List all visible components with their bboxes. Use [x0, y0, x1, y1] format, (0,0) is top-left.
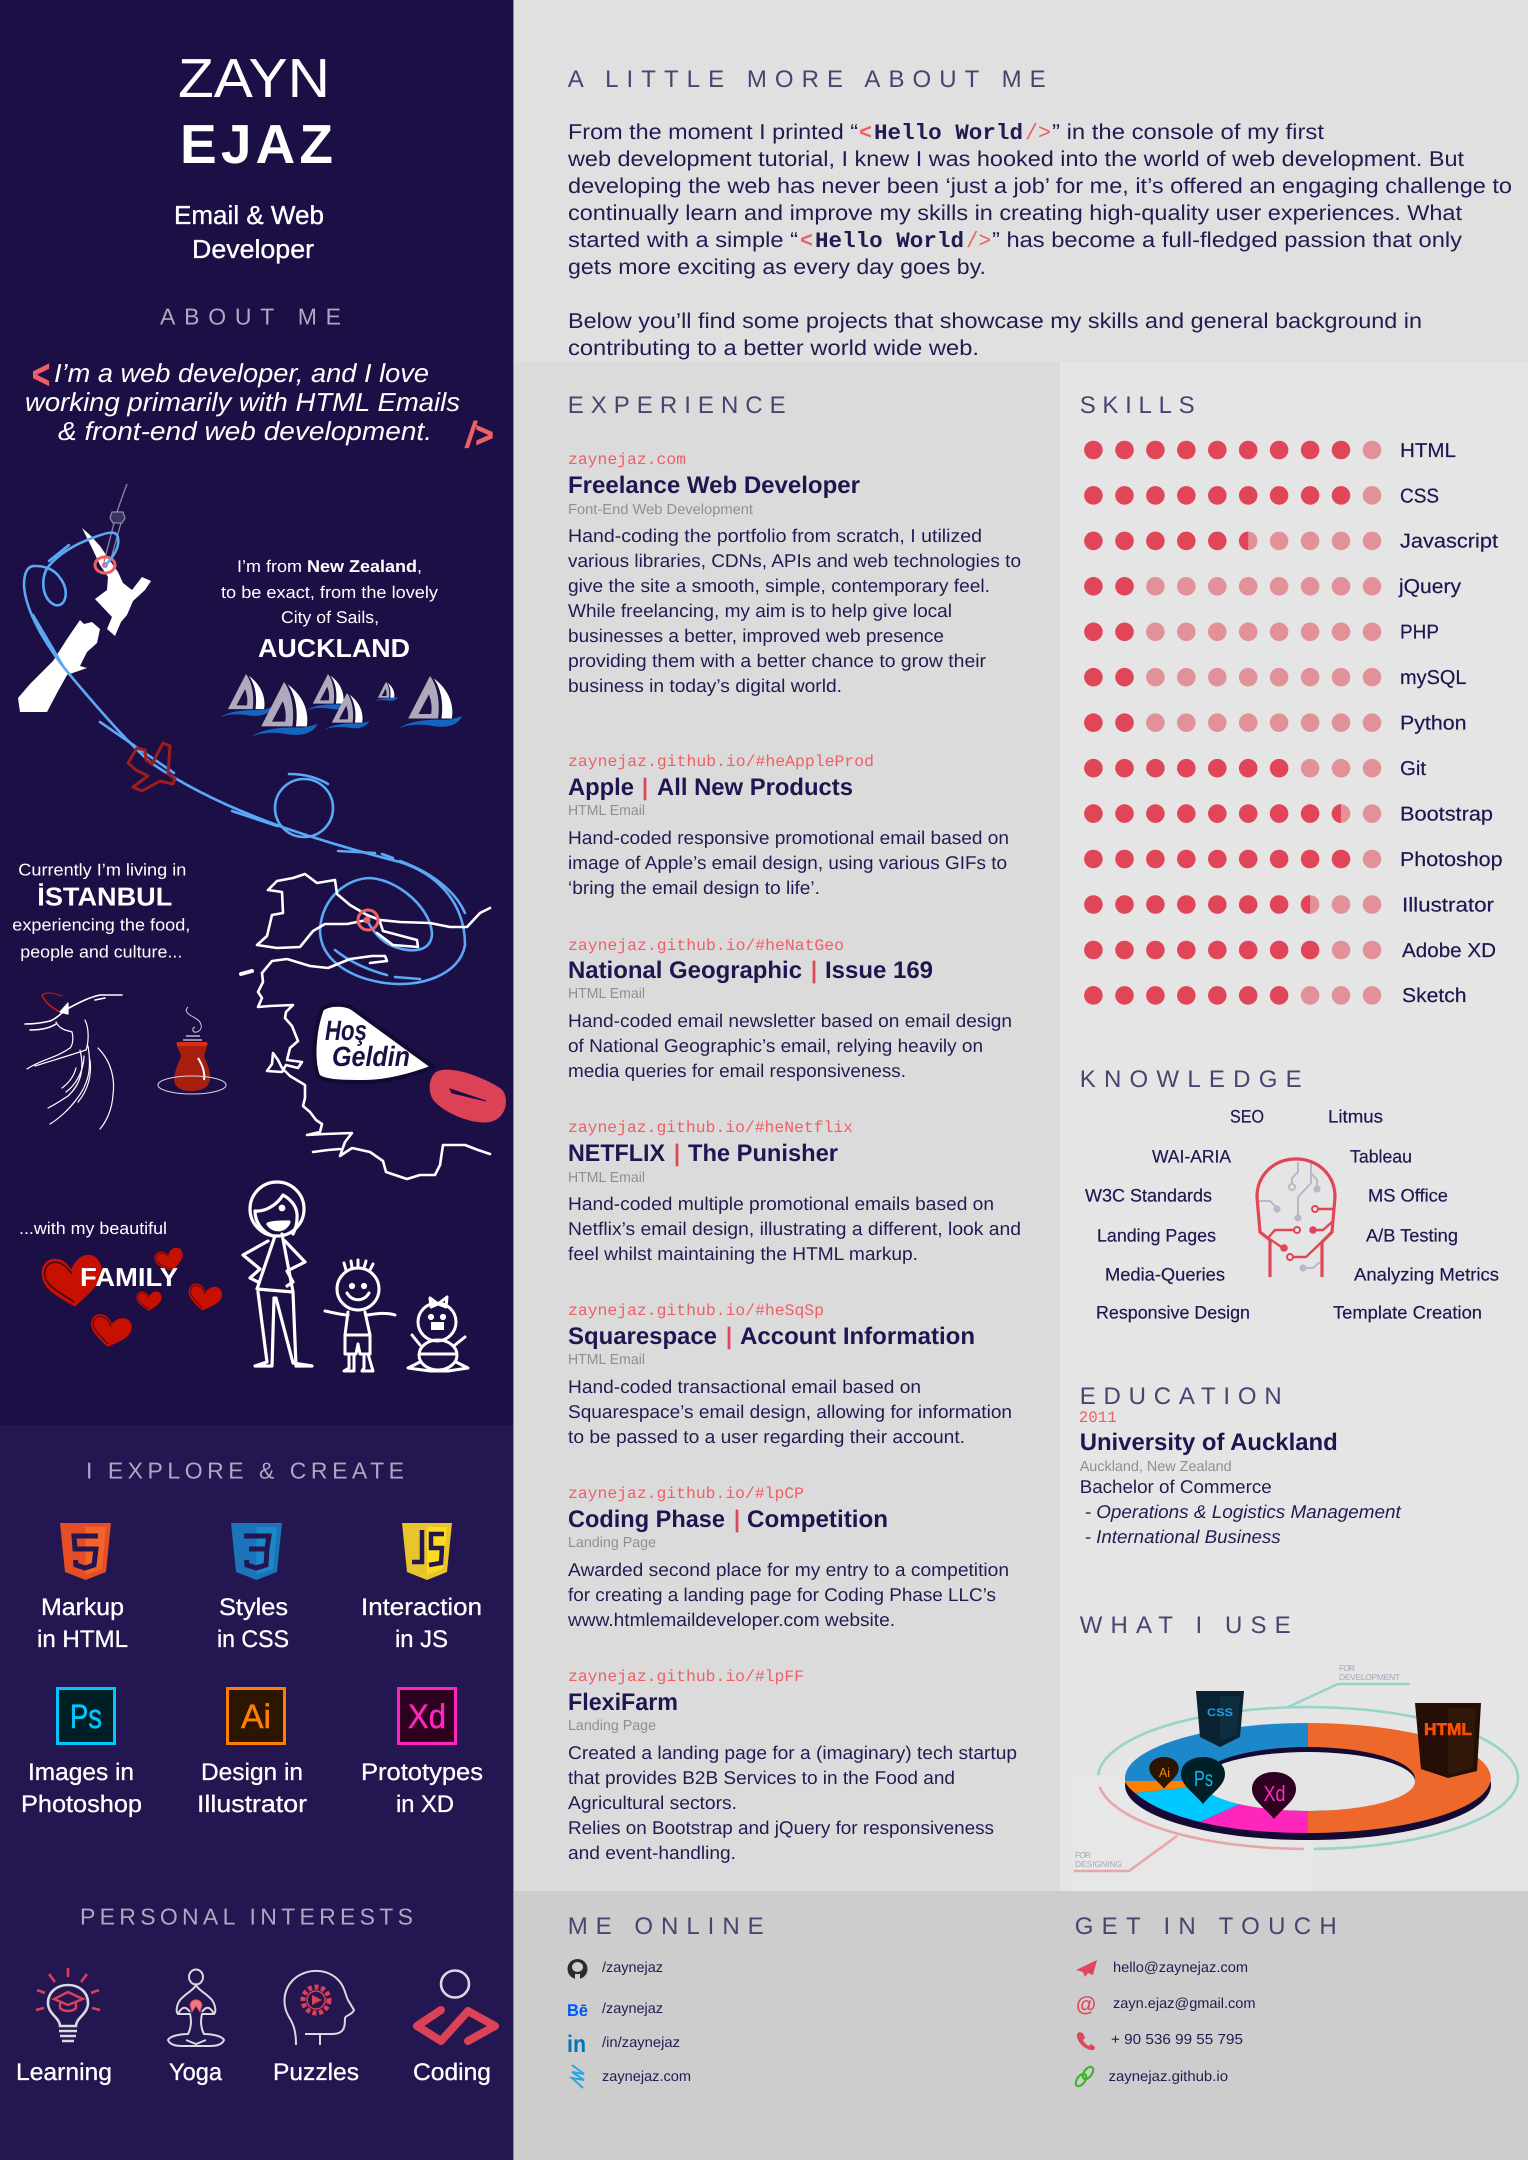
text block: knowledge left column [1085, 1107, 1264, 1323]
illustration: sailboats [219, 674, 462, 737]
entry: Squarespace: to be passed to a user regarding their account. [568, 1426, 965, 1447]
chart: skill Javascript: Javascript [1400, 531, 1498, 553]
illustration: son stick figure [325, 1260, 395, 1371]
illustration: hearts [40, 1246, 223, 1350]
text block: living in Istanbul: experiencing the food, [12, 915, 190, 934]
icon: website logo [572, 2065, 584, 2088]
illustration: flight path [24, 533, 465, 984]
icon: Adobe XD [398, 1688, 456, 1744]
entry: Squarespace: Account Information [740, 1323, 975, 1350]
entry: Netflix [568, 1119, 1021, 1264]
icon: plane [128, 743, 175, 791]
text block: education entry: - International Business [1085, 1526, 1281, 1547]
icon: Behance: Bē [567, 2001, 588, 2020]
text block: knowledge left column: SEO [1230, 1107, 1264, 1127]
callout: Hos Geldin speech bubble: Hoş [325, 1015, 367, 1046]
text block: knowledge left column: Landing Pages [1097, 1226, 1216, 1246]
label: markup in HTML: in HTML [37, 1626, 128, 1653]
icon: link [1074, 2065, 1095, 2088]
entry: freelance web developer: business in today’s digital world. [568, 675, 842, 696]
entry: Coding Phase: zaynejaz.github.io/#lpCP [568, 1485, 804, 1503]
label: interaction in JS [361, 1594, 482, 1653]
illustration: Auckland sky tower [104, 484, 127, 562]
text block: living in Istanbul: İSTANBUL [37, 881, 172, 911]
icon: Ai drop [1149, 1757, 1179, 1788]
label: styles in CSS: Styles [219, 1594, 288, 1621]
icon: Ps drop: Ps [1194, 1766, 1213, 1791]
label: prototypes in XD [361, 1759, 483, 1818]
icon: CSS badge [1196, 1691, 1244, 1747]
chart: skill Git: Git [1400, 758, 1426, 780]
text block: sidebar intro quote: working primarily with HTML Emails [25, 387, 460, 417]
text block: about paragraph: < [800, 229, 813, 254]
illustration: whirling dervish [25, 993, 122, 1129]
text block: about paragraph: developing the web has never been ‘just a job’ for me, it’s offered an engaging challenge to [568, 174, 1512, 198]
icon: Ai drop: Ai [1159, 1765, 1170, 1780]
chart: skill mySQL: mySQL [1400, 667, 1466, 689]
text block: about paragraph: < [859, 121, 872, 146]
illustration: mother stick figure [243, 1182, 312, 1366]
entry: Squarespace [568, 1302, 1012, 1447]
title: name: EJAZ [180, 113, 333, 175]
text: behance handle: /zaynejaz [602, 2001, 663, 2017]
entry: freelance web developer: give the site a smooth, simple, contemporary feel. [568, 575, 990, 596]
entry: FlexiFarm: Agricultural sectors. [568, 1792, 737, 1813]
subtitle: role: Developer [192, 234, 314, 264]
chart: skill PHP [1084, 622, 1439, 644]
text block: about paragraph: ” has become a full-fledged passion that only [992, 228, 1462, 252]
chart: skill PHP: PHP [1400, 622, 1439, 644]
icon: HTML badge: HTML [1424, 1720, 1472, 1739]
entry: Apple: zaynejaz.github.io/#heAppleProd [568, 753, 874, 771]
label: family: FAMILY [80, 1262, 178, 1292]
entry: National Geographic: | [811, 957, 817, 984]
label: design in Illustrator: Illustrator [197, 1791, 307, 1818]
text block: about paragraph: gets more exciting as every day goes by. [568, 255, 986, 279]
chart: skill Photoshop: Photoshop [1400, 849, 1502, 871]
text block: about paragraph [567, 120, 1512, 360]
entry: freelance web developer: Hand-coding the portfolio from scratch, I utilized [568, 525, 982, 546]
label: images in Photoshop [21, 1759, 142, 1818]
entry: freelance web developer: providing them with a better chance to grow their [568, 650, 986, 671]
callout: Hos Geldin speech bubble: Geldin [332, 1041, 410, 1072]
label: for designing [1075, 1850, 1122, 1869]
entry: freelance web developer: Font-End Web Development [568, 502, 753, 518]
icon: Xd drop [1252, 1772, 1296, 1819]
chart: skill Javascript [1084, 531, 1498, 553]
icon: learning bulb [36, 1968, 100, 2041]
label: yoga: Yoga [169, 2059, 223, 2086]
entry: National Geographic: zaynejaz.github.io/#heNatGeo [568, 937, 844, 955]
text block: about paragraph: contributing to a better world wide web. [568, 336, 979, 360]
text block: education entry: Auckland, New Zealand [1080, 1459, 1232, 1475]
entry: freelance web developer [568, 451, 1021, 696]
entry: Coding Phase: www.htmlemaildeveloper.com website. [567, 1609, 895, 1630]
icon: Illustrator [228, 1688, 284, 1744]
icon: Xd drop: Xd [1264, 1781, 1286, 1806]
icon: circuit head [1257, 1159, 1335, 1277]
label: design in Illustrator: Design in [201, 1759, 303, 1786]
heading: me online: ME ONLINE [568, 1913, 764, 1940]
text block: sidebar intro quote: /> [464, 414, 493, 455]
text block: knowledge right column: A/B Testing [1366, 1226, 1458, 1246]
icon: Photoshop: Ps [70, 1698, 102, 1736]
entry: Apple: All New Products [657, 774, 853, 801]
icon: HTML5 shield [60, 1523, 111, 1580]
subtitle: role [174, 200, 324, 264]
text block: education entry: University of Auckland [1080, 1429, 1338, 1456]
icon: Ps drop [1181, 1757, 1225, 1804]
entry: Netflix: feel whilst maintaining the HTML markup. [568, 1243, 918, 1264]
text block: sidebar intro quote [25, 353, 493, 455]
entry: Apple: ‘bring the email design to life’. [568, 877, 820, 898]
entry: National Geographic: of National Geographic’s email, relying heavily on [568, 1035, 983, 1056]
title: name [178, 47, 333, 175]
heading: about me: ABOUT ME [160, 303, 341, 329]
entry: Apple: | [642, 774, 648, 801]
entry: National Geographic [568, 937, 1012, 1081]
label: for development [1339, 1663, 1400, 1682]
entry: Coding Phase: for creating a landing page for Coding Phase LLC’s [568, 1584, 996, 1605]
text block: education entry [1079, 1409, 1402, 1547]
chart: skill Git [1084, 758, 1426, 780]
entry: Netflix: Hand-coded multiple promotional emails based on [568, 1193, 994, 1214]
chart: skill Sketch [1084, 985, 1466, 1007]
chart: skill Python [1084, 712, 1466, 734]
text block: living in Istanbul [12, 860, 190, 961]
text block: knowledge left column: WAI-ARIA [1152, 1147, 1231, 1167]
chart: skill jQuery [1084, 576, 1461, 598]
label: images in Photoshop: Photoshop [21, 1791, 142, 1818]
heading: personal interests: PERSONAL INTERESTS [80, 1903, 413, 1929]
heading: skills: SKILLS [1080, 392, 1195, 419]
text block: about paragraph: web development tutorial, I knew I was hooked into the world of web development. But [567, 147, 1464, 171]
entry: Netflix: | [674, 1140, 680, 1167]
callout: designing arc [1074, 1787, 1304, 1871]
entry: Netflix: The Punisher [688, 1140, 838, 1167]
chart: skill CSS: CSS [1400, 485, 1439, 507]
icon: HTML badge [1415, 1703, 1481, 1778]
label: learning: Learning [16, 2059, 112, 2086]
text block: sidebar intro quote: & front-end web development. [58, 416, 432, 446]
label: prototypes in XD: in XD [396, 1791, 454, 1818]
entry: Coding Phase [567, 1485, 1009, 1630]
entry: Squarespace: | [726, 1323, 732, 1350]
text block: education entry: - Operations & Logistics Management [1085, 1501, 1402, 1522]
chart: skill HTML [1084, 440, 1456, 462]
heading: knowledge: KNOWLEDGE [1080, 1066, 1302, 1093]
entry: National Geographic: Issue 169 [825, 957, 933, 984]
heading: a little more about me: A LITTLE MORE ABOUT ME [568, 66, 1046, 93]
label: prototypes in XD: Prototypes [361, 1759, 483, 1786]
label: interaction in JS: Interaction [361, 1594, 482, 1621]
chart: skill mySQL [1084, 667, 1466, 689]
illustration: map of Turkey [241, 874, 490, 1179]
text block: knowledge left column: Responsive Design [1096, 1303, 1250, 1323]
entry: Squarespace: HTML Email [568, 1352, 645, 1368]
icon: Auckland location target [95, 557, 115, 573]
entry: Netflix: zaynejaz.github.io/#heNetflix [568, 1119, 853, 1137]
label: coding: Coding [413, 2059, 491, 2086]
text block: about paragraph: /> [1025, 121, 1051, 146]
text block: knowledge right column: MS Office [1368, 1186, 1448, 1206]
label: images in Photoshop: Images in [28, 1759, 134, 1786]
entry: Coding Phase: Awarded second place for my entry to a competition [568, 1559, 1009, 1580]
text block: knowledge right column [1328, 1107, 1499, 1323]
entry: National Geographic: National Geographic [568, 957, 802, 984]
callout: development arc [1098, 1684, 1518, 1849]
text block: from New Zealand [221, 557, 439, 663]
entry: FlexiFarm: and event-handling. [568, 1842, 736, 1863]
chart: skill Photoshop [1084, 849, 1502, 871]
entry: FlexiFarm: Created a landing page for a (imaginary) tech startup [568, 1742, 1017, 1763]
icon: Istanbul location target [358, 910, 378, 930]
heading: get in touch: GET IN TOUCH [1075, 1913, 1337, 1940]
icon: CSS badge: CSS [1207, 1707, 1233, 1719]
entry: Coding Phase: Coding Phase [568, 1506, 725, 1533]
chart: skill CSS [1084, 485, 1439, 507]
entry: Coding Phase: | [734, 1506, 740, 1533]
text block: about paragraph: started with a simple “ [568, 228, 798, 252]
callout: Hos Geldin speech bubble [315, 1005, 433, 1082]
text: github pages: zaynejaz.github.io [1108, 2069, 1228, 2085]
chart: skill Illustrator: Illustrator [1402, 894, 1494, 916]
text block: beautiful family: ...with my beautiful [19, 1219, 167, 1238]
icon: paper plane [1076, 1960, 1097, 1977]
entry: Squarespace: Squarespace [568, 1323, 717, 1350]
label: styles in CSS: in CSS [217, 1626, 289, 1653]
entry: freelance web developer: While freelancing, my aim is to help give local [568, 600, 952, 621]
text: website: zaynejaz.com [602, 2069, 691, 2085]
icon: GitHub [568, 1959, 588, 1979]
text block: education entry: Bachelor of Commerce [1080, 1476, 1272, 1497]
entry: Apple: image of Apple’s email design, using various GIFs to [568, 852, 1007, 873]
text block: about paragraph: Below you’ll find some projects that showcase my skills and general background in [568, 309, 1422, 333]
label: markup in HTML: Markup [41, 1594, 124, 1621]
entry: Coding Phase: Competition [747, 1506, 888, 1533]
entry: Netflix: HTML Email [568, 1170, 645, 1186]
entry: Coding Phase: Landing Page [568, 1535, 656, 1551]
label: interaction in JS: in JS [395, 1626, 448, 1653]
icon: yoga figure [168, 1970, 224, 2046]
text block: about paragraph: ” in the console of my first [1052, 120, 1324, 144]
panel: main content backgrounds [514, 0, 1528, 2160]
text: email 2: zayn.ejaz@gmail.com [1113, 1996, 1256, 2012]
text: email 1: hello@zaynejaz.com [1113, 1960, 1248, 1976]
text block: education entry: 2011 [1079, 1409, 1117, 1427]
text block: about paragraph: Hello World [815, 229, 964, 254]
label: for development: DEVELOPMENT [1339, 1672, 1400, 1682]
label: for development: FOR [1339, 1663, 1355, 1673]
icon: puzzles head [284, 1971, 354, 2045]
entry: Apple: Apple [568, 774, 634, 801]
text block: knowledge right column: Litmus [1328, 1107, 1383, 1127]
entry: FlexiFarm: Landing Page [568, 1718, 656, 1734]
chart: skill Bootstrap: Bootstrap [1400, 803, 1493, 825]
chart: skill Bootstrap [1084, 803, 1493, 825]
label: markup in HTML [37, 1594, 128, 1653]
entry: FlexiFarm: FlexiFarm [568, 1689, 678, 1716]
label: design in Illustrator [197, 1759, 307, 1818]
entry: Squarespace: Squarespace’s email design, allowing for information [568, 1401, 1012, 1422]
label: puzzles: Puzzles [273, 2059, 359, 2086]
entry: freelance web developer: zaynejaz.com [568, 451, 686, 469]
entry: freelance web developer: various libraries, CDNs, APIs and web technologies to [568, 550, 1021, 571]
text block: knowledge right column: Tableau [1350, 1147, 1412, 1167]
illustration: Turkish tea [158, 1007, 226, 1094]
chart: skill HTML: HTML [1400, 440, 1456, 462]
text block: knowledge left column: Media-Queries [1105, 1265, 1225, 1285]
heading: I explore and create: I EXPLORE & CREATE [86, 1457, 404, 1483]
label: styles in CSS [217, 1594, 289, 1653]
icon: phone [1077, 2032, 1095, 2050]
text block: living in Istanbul: people and culture... [20, 942, 182, 961]
subtitle: role: Email & Web [174, 200, 324, 230]
entry: freelance web developer: businesses a better, improved web presence [568, 625, 944, 646]
text block: about paragraph: From the moment I printed “ [568, 120, 858, 144]
illustration: New Zealand map [18, 528, 151, 712]
text: phone number: + 90 536 99 55 795 [1111, 2032, 1243, 2048]
text block: from New Zealand: I’m from New Zealand , [237, 557, 422, 576]
chart: skill Adobe XD: Adobe XD [1402, 940, 1496, 962]
heading: experience: EXPERIENCE [568, 392, 786, 419]
text block: from New Zealand: City of Sails, [281, 608, 379, 627]
text: linkedin handle: /in/zaynejaz [602, 2035, 680, 2051]
entry: National Geographic: media queries for email responsiveness. [568, 1060, 906, 1081]
icon: Illustrator: Ai [241, 1698, 271, 1736]
entry: FlexiFarm: zaynejaz.github.io/#lpFF [568, 1668, 804, 1686]
entry: FlexiFarm: that provides B2B Services to in the Food and [568, 1767, 955, 1788]
text block: about paragraph: Hello World [874, 121, 1023, 146]
illustration: lips [430, 1070, 506, 1122]
label: for designing: DESIGNING [1075, 1859, 1122, 1869]
entry: Apple: Hand-coded responsive promotional email based on [568, 827, 1009, 848]
chart: skill jQuery: jQuery [1398, 576, 1461, 598]
entry: freelance web developer: Freelance Web Developer [568, 472, 860, 499]
entry: National Geographic: HTML Email [568, 986, 645, 1002]
text block: from New Zealand: AUCKLAND [258, 633, 410, 663]
entry: Squarespace: zaynejaz.github.io/#heSqSp [568, 1302, 824, 1320]
chart: skill Adobe XD [1084, 940, 1496, 962]
icon: Photoshop [58, 1688, 114, 1744]
icon: coding [417, 1970, 495, 2041]
entry: Netflix: NETFLIX [568, 1140, 665, 1167]
text block: knowledge left column: W3C Standards [1085, 1186, 1212, 1206]
heading: education: EDUCATION [1080, 1383, 1282, 1410]
icon: Adobe XD: Xd [408, 1698, 446, 1736]
chart: skill Illustrator [1084, 894, 1494, 916]
label: for designing: FOR [1075, 1850, 1091, 1860]
text block: about paragraph: /> [966, 229, 991, 254]
icon: CSS3 shield [231, 1523, 282, 1580]
icon: JS shield [402, 1523, 452, 1580]
icon: at sign: @ [1076, 1993, 1096, 2016]
chart: skill Sketch: Sketch [1402, 985, 1466, 1007]
entry: Netflix: Netflix’s email design, illustrating a different, look and [568, 1218, 1021, 1239]
text block: knowledge right column: Analyzing Metrics [1354, 1265, 1499, 1285]
icon: LinkedIn: in [567, 2031, 586, 2058]
entry: Apple: HTML Email [568, 803, 645, 819]
text: github handle: /zaynejaz [602, 1960, 663, 1976]
text block: sidebar intro quote: I’m a web developer, and I love [54, 358, 429, 388]
illustration: baby stick figure [408, 1297, 468, 1371]
text block: sidebar intro quote: < [32, 353, 50, 397]
chart: tools ring [1074, 1684, 1518, 1871]
chart: skill Python: Python [1400, 713, 1466, 735]
entry: Apple [568, 753, 1009, 898]
entry: Squarespace: Hand-coded transactional email based on [568, 1376, 921, 1397]
entry: FlexiFarm [568, 1668, 1017, 1863]
title: name: ZAYN [178, 47, 330, 109]
text block: knowledge right column: Template Creation [1333, 1303, 1482, 1323]
text block: from New Zealand: to be exact, from the lovely [221, 583, 439, 602]
entry: National Geographic: Hand-coded email newsletter based on email design [568, 1010, 1012, 1031]
entry: FlexiFarm: Relies on Bootstrap and jQuery for responsiveness [568, 1817, 994, 1838]
text block: living in Istanbul: Currently I’m living in [18, 860, 186, 879]
heading: what I use: WHAT I USE [1080, 1612, 1291, 1639]
text block: about paragraph: continually learn and improve my skills in creating high-quality user experiences. What [568, 201, 1462, 225]
panel: sidebar background [0, 0, 514, 2160]
